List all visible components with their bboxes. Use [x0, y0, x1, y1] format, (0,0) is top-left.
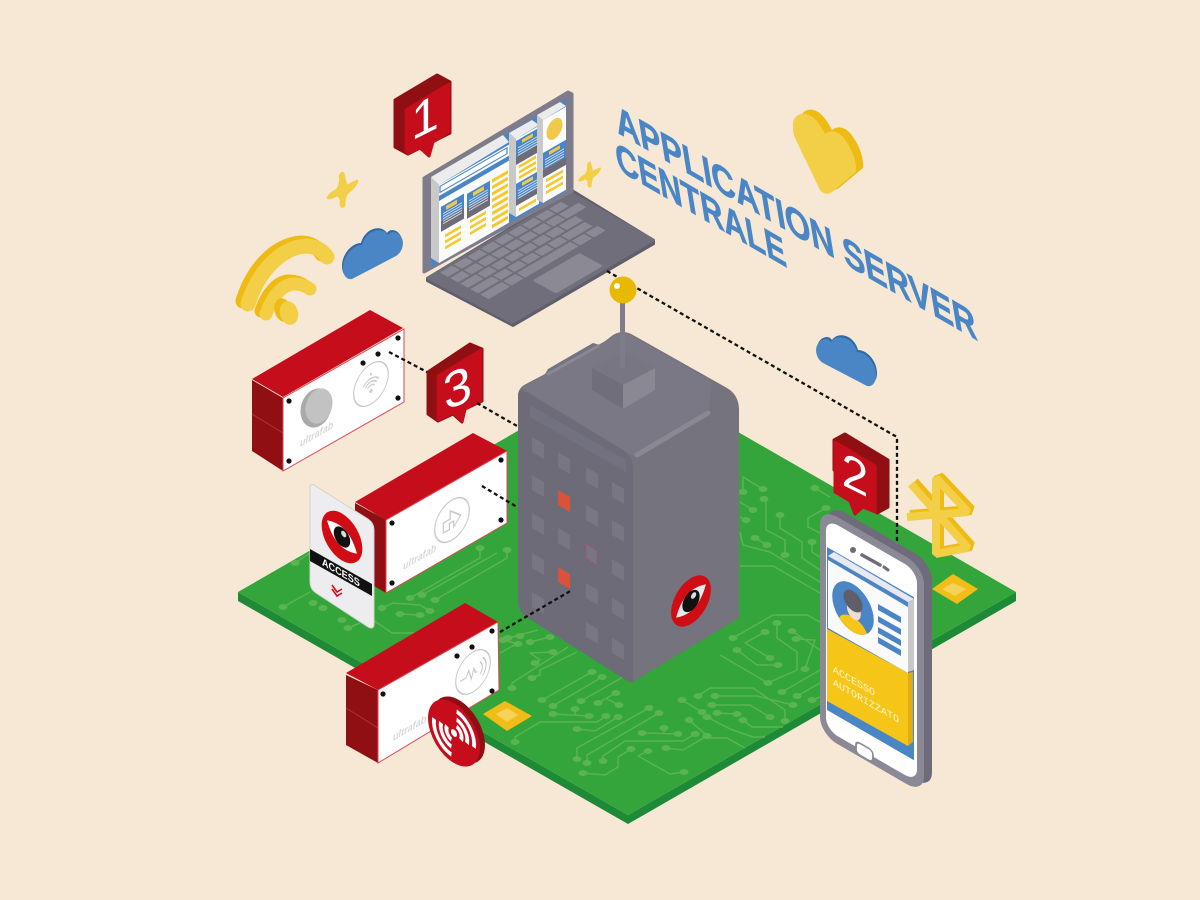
dashed lines: readers to server	[389, 352, 572, 632]
icon: heart	[793, 110, 863, 194]
reader device 2	[355, 433, 507, 593]
wifi badge	[354, 354, 388, 414]
smartphone	[820, 503, 932, 794]
icon: cloud right	[816, 335, 877, 386]
infographic scene	[236, 74, 1016, 824]
phone frame	[820, 507, 924, 794]
dashed line: laptop to server to phone	[607, 271, 897, 550]
building eye logo	[671, 566, 711, 636]
access card	[310, 484, 374, 628]
web page 2	[509, 120, 539, 217]
building roof	[522, 331, 712, 455]
laptop lid	[424, 92, 572, 272]
building windows	[532, 437, 624, 660]
laptop screen	[431, 99, 566, 267]
building left face	[518, 390, 633, 682]
eye logo	[322, 502, 362, 572]
building	[518, 331, 739, 682]
notification badge 3: 3	[441, 355, 474, 422]
notification badge 3	[428, 344, 482, 422]
access label: ACCESS	[322, 557, 360, 590]
chip near reader	[483, 701, 532, 731]
icon: sparkle left	[328, 173, 357, 207]
antenna	[610, 276, 636, 368]
title: application server centrale: APPLICATION SERVER	[612, 96, 980, 350]
notification badge 1: 1	[411, 83, 439, 152]
screen blue	[827, 547, 914, 760]
notification badge 2: 2	[842, 441, 868, 508]
lens dome	[296, 384, 337, 432]
laptop	[424, 92, 654, 326]
home button	[856, 741, 873, 763]
yellow access panel: AUTORIZZATO	[833, 678, 899, 727]
brand label: ultrafab	[393, 713, 427, 744]
web page 3	[537, 102, 566, 203]
nfc red disc	[428, 685, 485, 778]
yellow access panel: ACCESSO	[833, 665, 875, 700]
notification badge 1	[395, 75, 450, 156]
black band	[310, 549, 372, 596]
icon: cloud left	[342, 228, 403, 279]
web page 1	[431, 135, 509, 263]
avatar	[832, 581, 874, 635]
profile card	[828, 552, 914, 673]
icon: wifi	[243, 243, 327, 327]
title: application server centrale: CENTRALE	[612, 133, 789, 277]
laptop base	[427, 190, 654, 326]
reader device 3	[346, 603, 499, 763]
camera and speaker	[850, 547, 888, 570]
building silhouette and right face	[518, 332, 739, 682]
roof box	[592, 352, 655, 409]
icon: sparkle right	[579, 163, 600, 187]
red chevrons	[332, 585, 342, 596]
notification badge 2	[834, 434, 888, 514]
building red windows	[558, 490, 570, 589]
phone side	[828, 503, 932, 790]
reader device 1	[252, 310, 404, 471]
info lines	[878, 604, 901, 656]
bluetooth icon	[907, 476, 971, 554]
nfc badge	[435, 490, 469, 550]
yellow access panel	[827, 629, 913, 746]
brand label: ultrafab	[300, 419, 334, 450]
circuit board	[238, 368, 1016, 824]
brand label: ultrafab	[403, 542, 437, 573]
chip near phone	[932, 574, 978, 604]
screw holes	[286, 335, 401, 464]
wave badge	[456, 642, 490, 702]
